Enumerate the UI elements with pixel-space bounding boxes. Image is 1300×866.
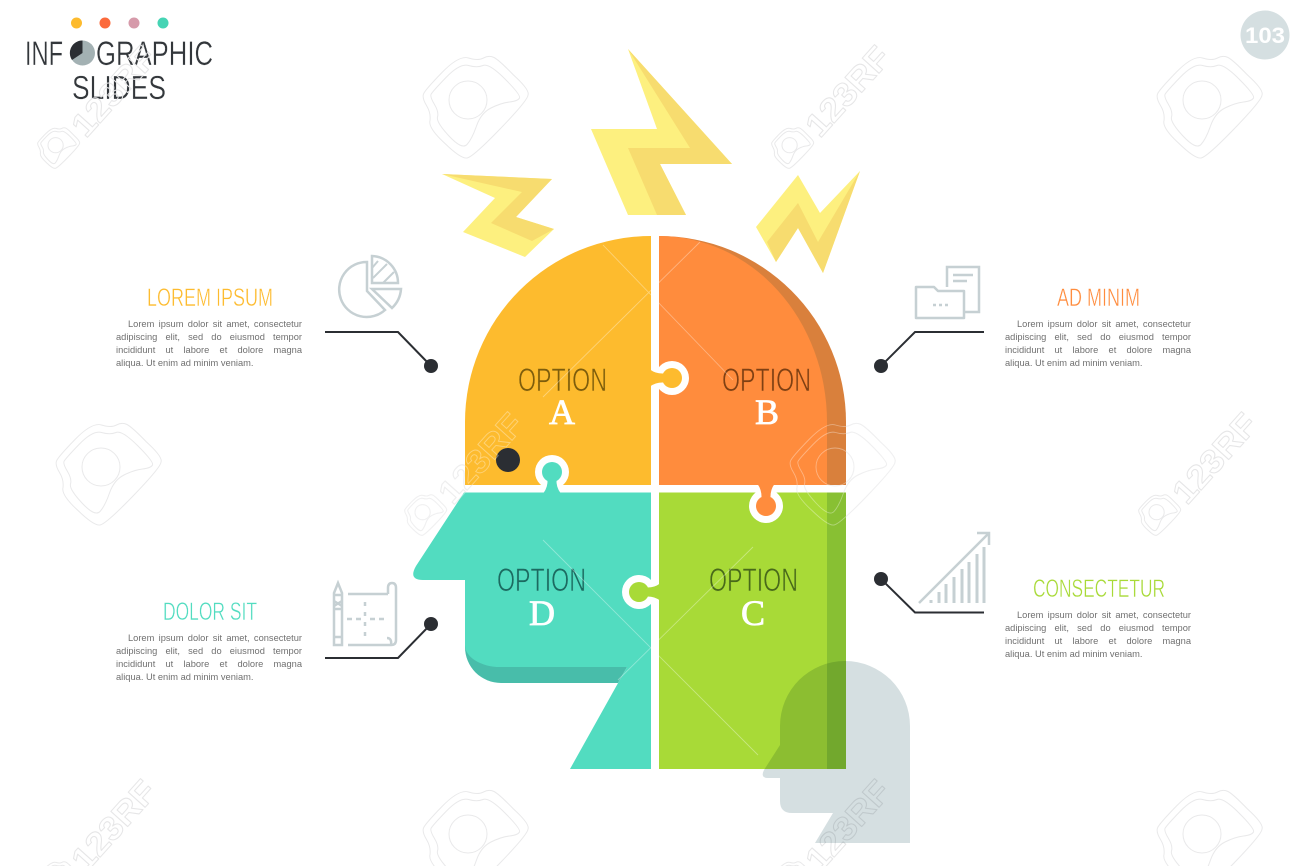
connector (874, 332, 984, 373)
lightning bolts (442, 49, 860, 273)
text block: aliqua. Ut enim ad minim veniam. (1005, 649, 1142, 659)
logo: Infographic Slides (25, 18, 213, 106)
watermark: stock photo logos: 123RF (798, 39, 897, 144)
text block: Lorem ipsum dolor sit amet, consectetur (128, 633, 302, 643)
text block: incididunt ut labore et dolore magna (1005, 636, 1191, 646)
text block: incididunt ut labore et dolore magna (1005, 345, 1191, 355)
panel: option B: OPTION (722, 362, 811, 398)
text block: aliqua. Ut enim ad minim veniam. (116, 358, 253, 368)
panel: option A: OPTION (518, 362, 607, 398)
page number badge: 103 (1245, 23, 1285, 48)
text block: aliqua. Ut enim ad minim veniam. (116, 672, 253, 682)
icon: folder and document (916, 267, 979, 318)
panel: Consectetur (874, 533, 1191, 661)
panel: Lorem Ipsum (116, 256, 438, 373)
heading: LOREM IPSUM (147, 284, 273, 312)
icon: rising bar chart (919, 533, 989, 603)
text block: Lorem ipsum dolor sit amet, consectetur (1017, 319, 1191, 329)
icon: left lightning bolt (442, 174, 554, 257)
logo: Infographic Slides: SLIDES (72, 69, 166, 106)
panel: option C: OPTION (709, 562, 798, 598)
watermark overlay on head: 123RF (431, 406, 530, 511)
panel: option C: C (741, 593, 765, 633)
connector (874, 572, 984, 612)
panel: Ad Minim (874, 267, 1191, 373)
watermark: stock photo logos: 123RF (64, 39, 163, 144)
text block (116, 318, 302, 370)
logo: Infographic Slides: INF (25, 35, 63, 73)
text block (1005, 318, 1191, 370)
head puzzle (413, 236, 846, 769)
text block: adipiscing elit, sed do eiusmod tempor (1005, 623, 1191, 633)
text block: incididunt ut labore et dolore magna (116, 659, 302, 669)
connector (325, 617, 438, 658)
puzzle tab: D into A (535, 455, 569, 493)
puzzle tab: A into B (650, 361, 689, 395)
icon: blueprint and pencil (334, 583, 396, 645)
watermark: stock photo logos: 123RF (431, 406, 530, 511)
panel: Dolor Sit (116, 583, 438, 684)
watermark: stock photo logos: 123RF (1165, 406, 1264, 511)
watermark overlay on head (405, 242, 895, 755)
text block (1005, 609, 1191, 661)
text block: adipiscing elit, sed do eiusmod tempor (116, 646, 302, 656)
text block: aliqua. Ut enim ad minim veniam. (1005, 358, 1142, 368)
panel: option D: D (529, 593, 555, 633)
heading: CONSECTETUR (1033, 575, 1165, 603)
panel: option C (659, 492, 846, 769)
connector (325, 332, 438, 373)
text block (116, 632, 302, 684)
panel: option A (465, 236, 651, 485)
puzzle tab: B into C (749, 484, 783, 523)
icon: centre lightning bolt (591, 49, 732, 215)
small grey head silhouette (763, 661, 910, 843)
panel: option B (659, 236, 846, 485)
panel: option D (413, 492, 651, 769)
icon: pie chart (339, 256, 401, 317)
text block: adipiscing elit, sed do eiusmod tempor (1005, 332, 1191, 342)
panel: option B: B (755, 392, 779, 432)
text block: Lorem ipsum dolor sit amet, consectetur (1017, 610, 1191, 620)
panel: option D: OPTION (497, 562, 586, 598)
panel: option A: A (549, 392, 575, 432)
heading: DOLOR SIT (163, 598, 257, 626)
text block: adipiscing elit, sed do eiusmod tempor (116, 332, 302, 342)
text block: Lorem ipsum dolor sit amet, consectetur (128, 319, 302, 329)
page number badge (1240, 10, 1290, 60)
heading: AD MINIM (1057, 284, 1140, 312)
puzzle tab: C into D (622, 575, 660, 609)
text block: incididunt ut labore et dolore magna (116, 345, 302, 355)
logo: Infographic Slides: GRAPHIC (96, 35, 213, 73)
icon: right lightning bolt (756, 171, 860, 273)
